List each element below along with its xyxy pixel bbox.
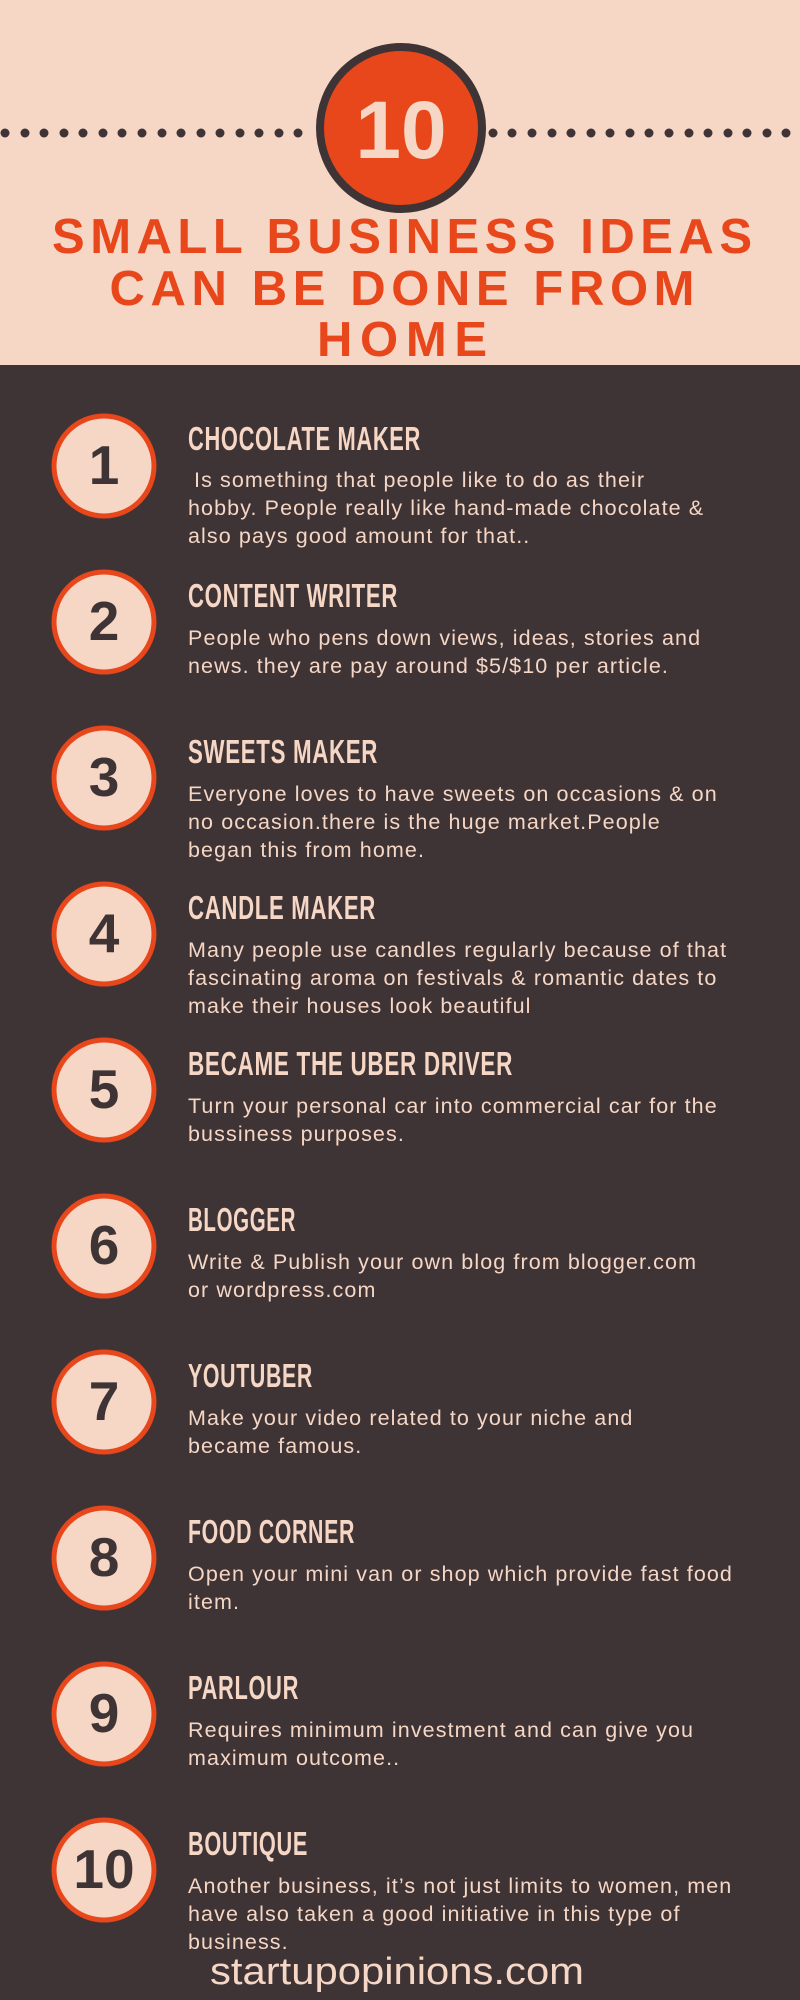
item 7 xyxy=(54,1352,633,1458)
header panel xyxy=(0,0,800,367)
item 8: FOOD CORNER xyxy=(188,1513,355,1550)
title: HOME xyxy=(317,313,487,367)
item 2: news. they are pay around $5/$10 per article. xyxy=(188,654,669,678)
item 2: People who pens down views, ideas, stories and xyxy=(188,626,701,650)
item 2: CONTENT WRITER xyxy=(188,577,398,614)
title xyxy=(52,210,752,367)
title: CAN BE DONE FROM xyxy=(110,262,694,316)
item 9: Requires minimum investment and can give you xyxy=(188,1718,694,1742)
item 4 xyxy=(54,884,727,1018)
item 2: 2 xyxy=(89,590,119,652)
item 8: item. xyxy=(188,1590,240,1614)
item 9: maximum outcome.. xyxy=(188,1746,400,1770)
item 3: no occasion.there is the huge market.People xyxy=(188,810,661,834)
item 3: SWEETS MAKER xyxy=(188,733,378,770)
badge: 10: 10 xyxy=(355,85,447,176)
item 7: became famous. xyxy=(188,1434,362,1458)
item 9: 9 xyxy=(89,1682,119,1744)
item 4: CANDLE MAKER xyxy=(188,889,376,926)
item 10: BOUTIQUE xyxy=(188,1825,308,1862)
item 1 xyxy=(54,416,704,548)
item 10: 10 xyxy=(73,1838,135,1900)
item 1: CHOCOLATE MAKER xyxy=(188,420,421,457)
item 6: 6 xyxy=(89,1214,119,1276)
item 10: have also taken a good initiative in this type of xyxy=(188,1902,681,1926)
item 4: make their houses look beautiful xyxy=(188,994,532,1018)
item 8: Open your mini van or shop which provide fast food xyxy=(188,1562,733,1586)
item 10: Another business, it’s not just limits to women, men xyxy=(188,1874,732,1898)
item 5: BECAME THE UBER DRIVER xyxy=(188,1045,513,1082)
item 7: Make your video related to your niche and xyxy=(188,1406,633,1430)
item 1: hobby. People really like hand-made chocolate & xyxy=(188,496,704,520)
item 8: 8 xyxy=(89,1526,119,1588)
item 1: Is something that people like to do as their xyxy=(194,468,645,492)
item 10 xyxy=(54,1820,732,1954)
item 4: fascinating aroma on festivals & romantic dates to xyxy=(188,966,717,990)
badge: 10 xyxy=(320,47,482,209)
item 3: began this from home. xyxy=(188,838,425,862)
item 9: PARLOUR xyxy=(188,1669,299,1706)
item 5: bussiness purposes. xyxy=(188,1122,405,1146)
item 6: BLOGGER xyxy=(188,1201,296,1238)
title: SMALL BUSINESS IDEAS xyxy=(52,210,752,264)
item 3: 3 xyxy=(89,746,119,808)
footer: website: startupopinions.com xyxy=(210,1951,584,1993)
dotted line right xyxy=(488,128,790,138)
item 6 xyxy=(54,1196,697,1302)
item 7: YOUTUBER xyxy=(188,1357,313,1394)
item 3 xyxy=(54,728,718,862)
item 8 xyxy=(54,1508,733,1614)
item 5 xyxy=(54,1040,718,1146)
item 3: Everyone loves to have sweets on occasions & on xyxy=(188,782,718,806)
item 1: also pays good amount for that.. xyxy=(188,524,530,548)
item 10: business. xyxy=(188,1930,289,1954)
item 5: Turn your personal car into commercial car for the xyxy=(188,1094,718,1118)
dotted line left xyxy=(0,128,302,138)
item 5: 5 xyxy=(89,1058,119,1120)
item 4: 4 xyxy=(89,902,120,964)
item 1: 1 xyxy=(89,434,119,496)
item 4: Many people use candles regularly because of that xyxy=(188,938,727,962)
item 2 xyxy=(54,572,701,678)
item 6: Write & Publish your own blog from blogger.com xyxy=(188,1250,697,1274)
item 6: or wordpress.com xyxy=(188,1278,376,1302)
item 7: 7 xyxy=(89,1370,119,1432)
item 9 xyxy=(54,1664,694,1770)
